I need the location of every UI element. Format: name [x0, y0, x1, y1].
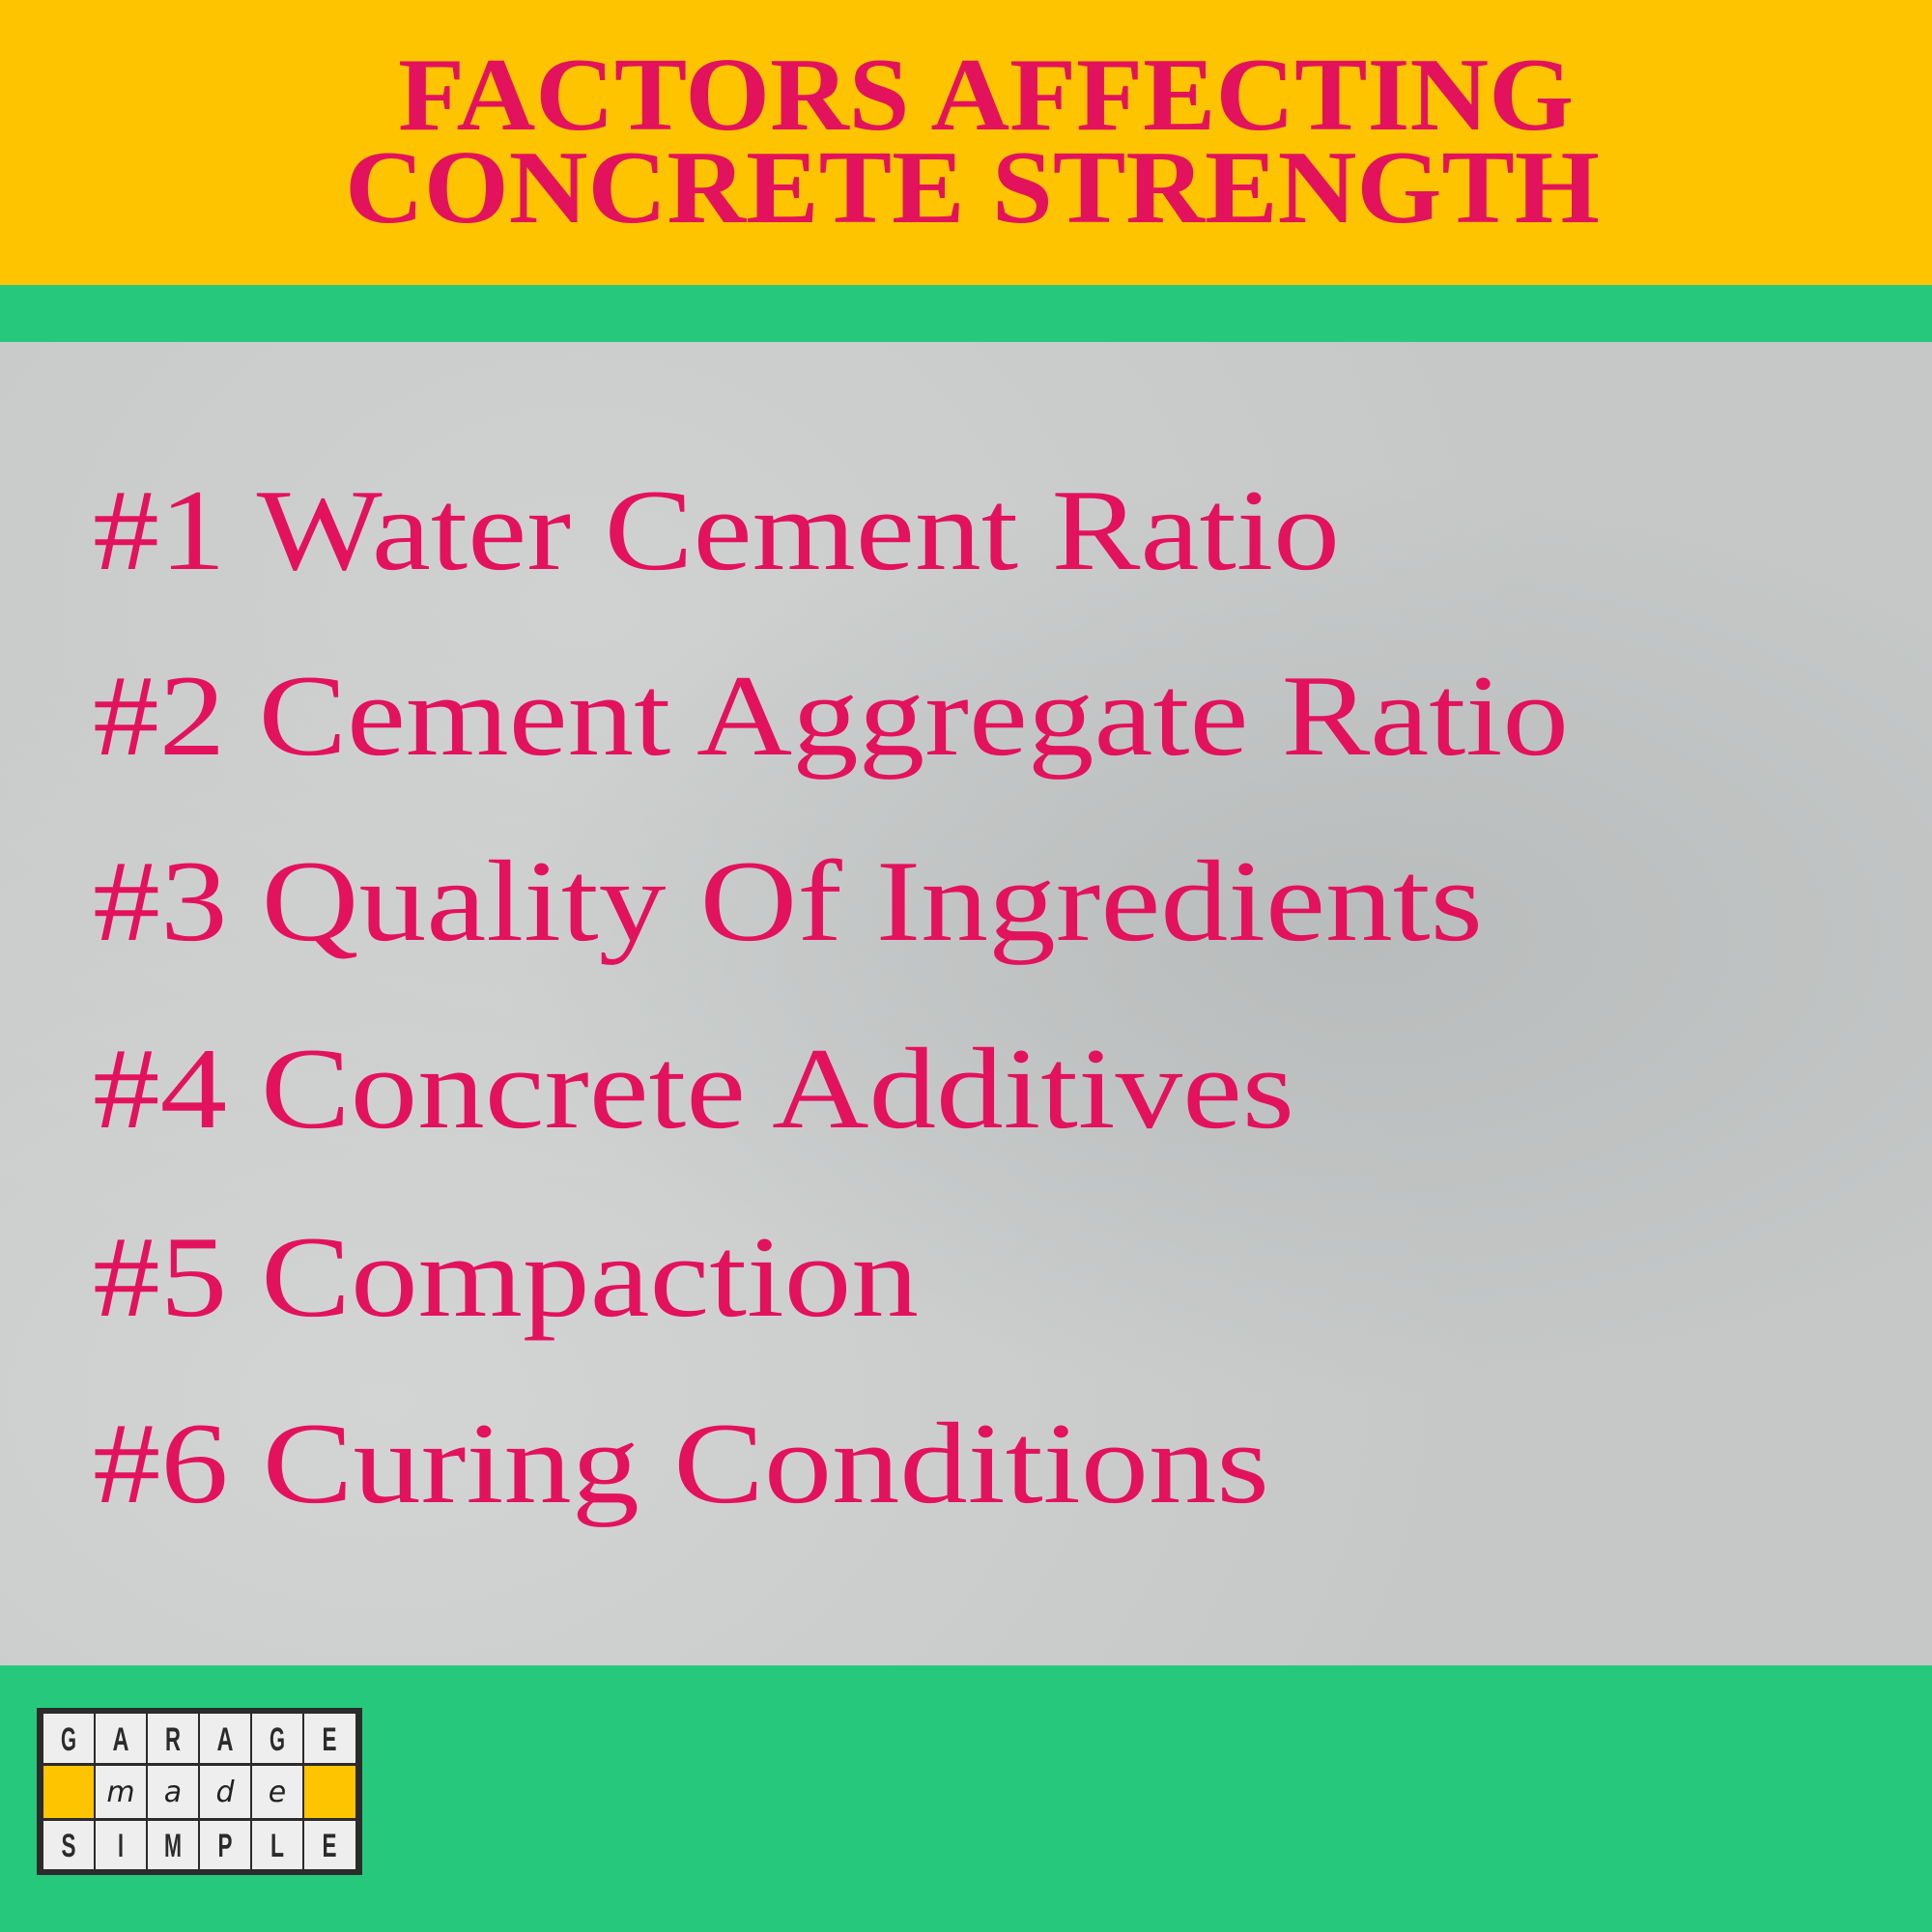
logo: garage made simple: P	[218, 1828, 232, 1864]
panel: concrete background	[0, 342, 1932, 1665]
title: FACTORS AFFECTING	[398, 38, 1574, 153]
list of factors: #1 Water Cement Ratio	[93, 466, 1340, 594]
list of factors: #4 Concrete Additives	[93, 1024, 1294, 1152]
list of factors	[93, 466, 1569, 1527]
logo: garage made simple: A	[216, 1721, 234, 1758]
logo: garage made simple: G	[61, 1721, 76, 1758]
logo: garage made simple	[37, 1708, 362, 1875]
logo: garage made simple: E	[323, 1721, 336, 1758]
logo: garage made simple: E	[323, 1828, 336, 1864]
list of factors: #3 Quality Of Ingredients	[93, 837, 1483, 965]
logo: garage made simple: A	[112, 1721, 129, 1758]
logo: garage made simple: m	[106, 1776, 135, 1809]
list of factors: #5 Compaction	[93, 1212, 919, 1341]
logo: garage made simple: S	[62, 1828, 75, 1864]
logo: garage made simple: e	[269, 1776, 286, 1809]
logo: garage made simple: I	[118, 1828, 124, 1864]
list of factors: #6 Curing Conditions	[93, 1399, 1269, 1527]
logo: garage made simple: R	[165, 1721, 181, 1758]
title: CONCRETE STRENGTH	[345, 130, 1600, 245]
logo: garage made simple: L	[270, 1828, 284, 1864]
title	[345, 38, 1600, 245]
green stripe	[0, 285, 1932, 342]
list of factors: #2 Cement Aggregate Ratio	[93, 651, 1569, 780]
logo: garage made simple: G	[270, 1721, 285, 1758]
logo: garage made simple: d	[215, 1776, 235, 1809]
logo: garage made simple: M	[164, 1828, 182, 1864]
header band	[0, 0, 1932, 285]
logo: garage made simple: a	[164, 1776, 182, 1809]
